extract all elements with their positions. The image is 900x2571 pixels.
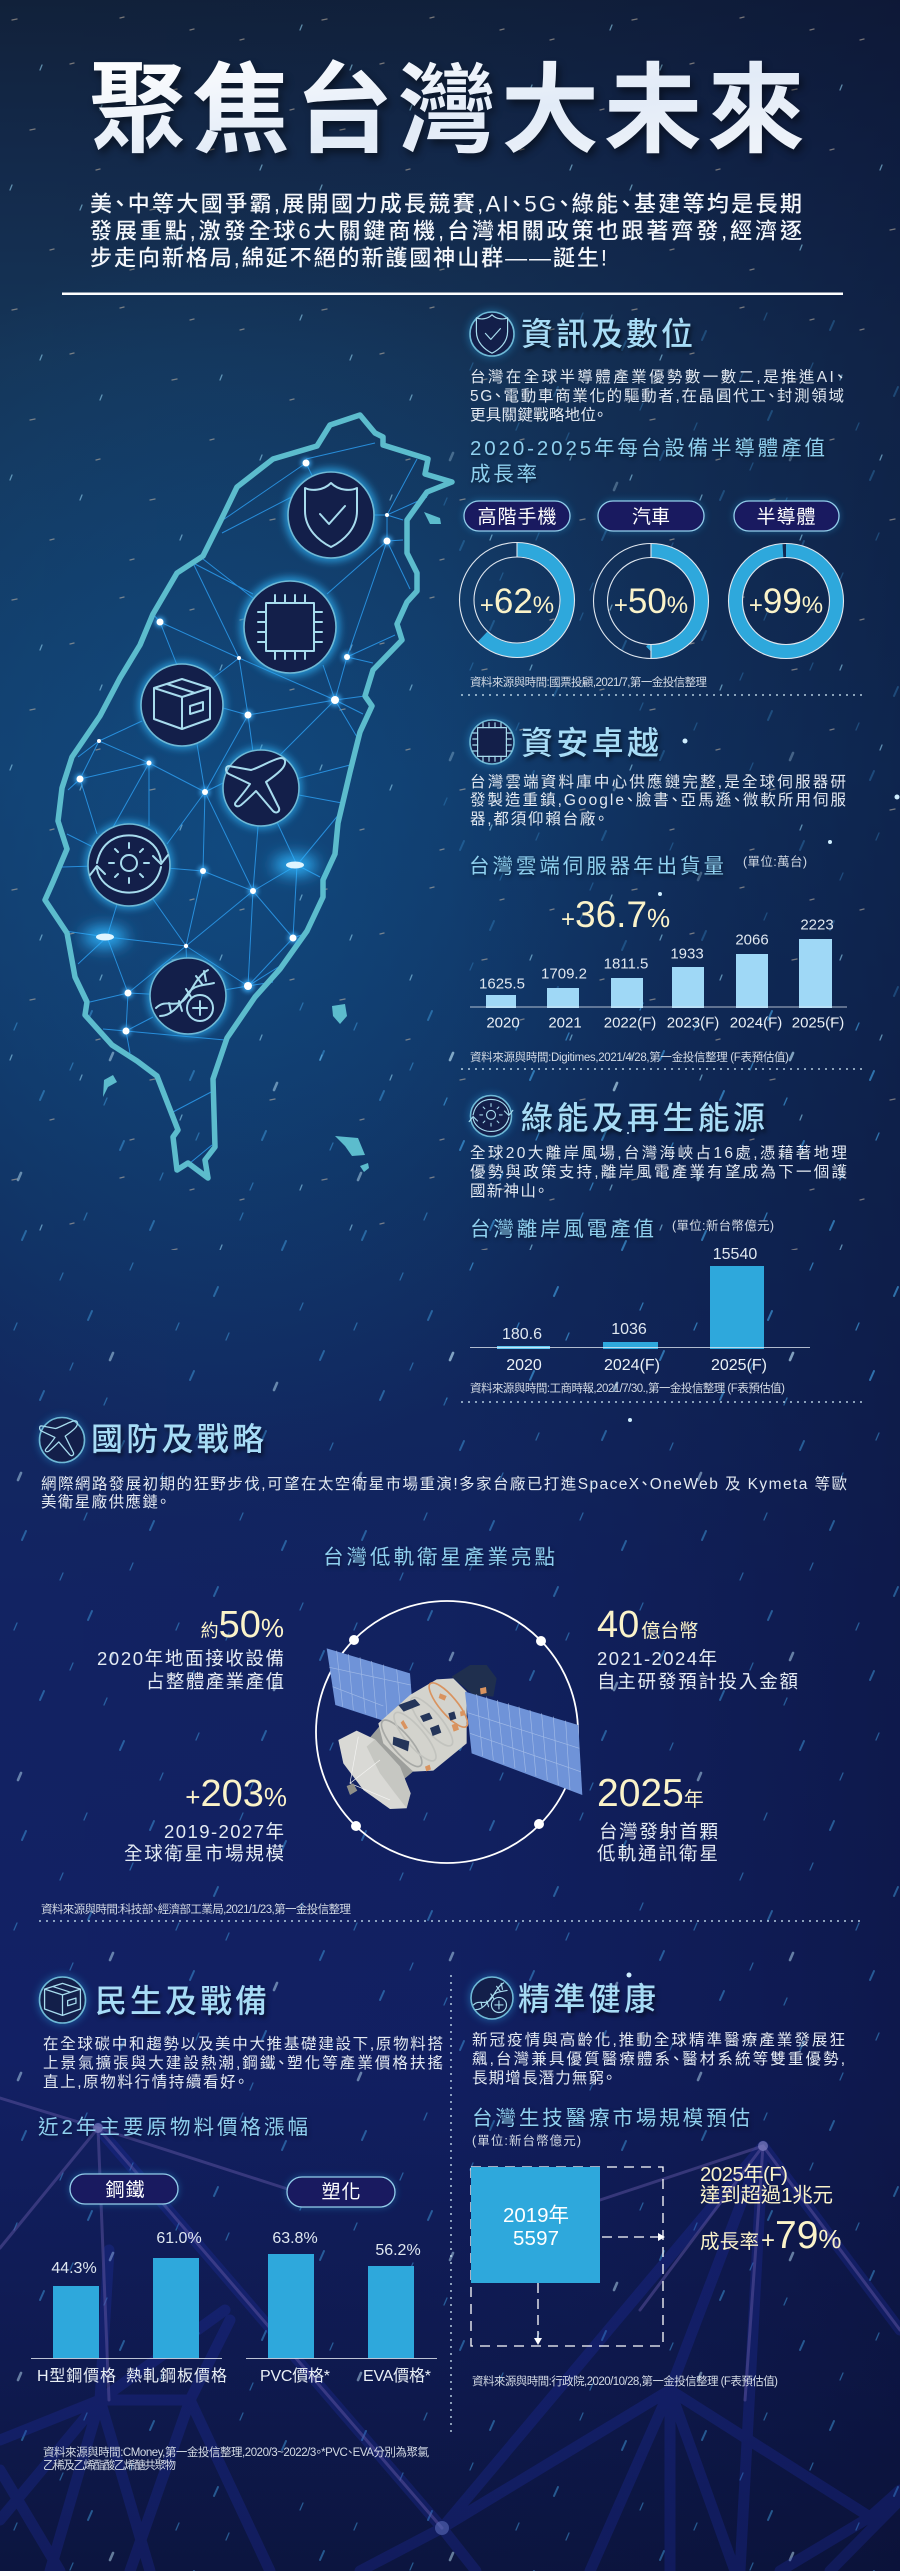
bar chart: servers: 2066 xyxy=(735,932,769,948)
bar chart: offshore wind: 1036 xyxy=(611,1321,647,1338)
chart title: 近2年主要原物料價格漲幅 xyxy=(38,2116,308,2139)
bar chart: materials: 56.2% xyxy=(375,2242,421,2259)
chart title: 台灣雲端伺服器年出貨量 xyxy=(469,855,724,878)
bar chart: servers xyxy=(470,916,847,1032)
bar chart: servers: 2021 xyxy=(548,1014,582,1032)
heading: 資安卓越 xyxy=(521,725,659,761)
stat: 40億台幣: 2021-2024年 xyxy=(597,1648,717,1669)
body text: 發製造重鎮,Google、臉書、亞馬遜、微軟所用伺服 xyxy=(470,791,846,809)
bar chart: materials: 61.0% xyxy=(156,2230,202,2247)
stat: +203% xyxy=(124,1773,287,1864)
intro text: 美、中等大國爭霸,展開國力成長競賽,AI、5G、綠能、基建等均是長期 xyxy=(90,192,802,216)
icon: plane xyxy=(223,750,299,826)
left solar panel xyxy=(327,1648,412,1721)
source: 資料來源與時間:國票投顧,2021/7,第一金投信整理 xyxy=(470,675,708,689)
bar chart: servers: 1709.2 xyxy=(541,966,587,982)
bar chart: materials: 63.8% xyxy=(272,2230,318,2247)
body text: 器,都須仰賴台廠。 xyxy=(470,809,605,828)
panel: 資安卓越 xyxy=(468,718,847,1064)
stat: 40億台幣: 自主研發預計投入金額 xyxy=(597,1671,798,1692)
stat: 40億台幣 xyxy=(597,1604,798,1692)
bar chart: offshore wind xyxy=(470,1246,810,1374)
body text xyxy=(470,772,846,828)
panel: 精準健康 xyxy=(469,1975,845,2388)
body text: 優勢與政策支持,離岸風電產業有望成為下一個護 xyxy=(470,1162,847,1181)
heading icon xyxy=(468,718,516,766)
callout: growth: +79% xyxy=(761,2214,842,2257)
pills: 半導體 xyxy=(756,506,816,528)
body text: 在全球碳中和趨勢以及美中大推基礎建設下,原物料搭 xyxy=(43,2035,443,2053)
body text: 上景氣擴張與大建設熱潮,鋼鐵、塑化等產業價格扶搖 xyxy=(43,2053,443,2072)
stat: 約50% xyxy=(97,1604,284,1692)
bar chart: servers: 2024(F) xyxy=(730,1014,782,1032)
chart title: 2020-2025年每台設備半導體產值 xyxy=(470,437,825,460)
bar chart: materials: EVA價格* xyxy=(363,2367,431,2385)
stat: 約50%: 2020年地面接收設備 xyxy=(97,1648,284,1669)
chart title: 台灣離岸風電產值 xyxy=(470,1218,654,1241)
body text: 5G、電動車商業化的驅動者,在晶圓代工、封測領域 xyxy=(470,387,844,405)
intro text: 步走向新格局,綿延不絕的新護國神山群——誕生! xyxy=(90,246,607,270)
stat: 2025年: 台灣發射首顆 xyxy=(599,1821,718,1842)
body text: 飆,台灣兼具優質醫療體系、醫材系統等雙重優勢, xyxy=(472,2049,845,2068)
panel: 國防及戰略 xyxy=(38,1416,847,1916)
heading: 綠能及再生能源 xyxy=(521,1100,765,1136)
panel: 資訊及數位 xyxy=(460,310,844,689)
source: 資料來源與時間:行政院,2020/10/28,第一金投信整理 (F表預估值) xyxy=(472,2374,778,2388)
panel: 綠能及再生能源 xyxy=(469,1094,847,1395)
callout: growth xyxy=(700,2163,842,2257)
satellite xyxy=(327,1648,582,1809)
donut: 汽車 50% xyxy=(594,544,708,659)
growth callout: +36.7% xyxy=(561,894,670,935)
source: 乙稀及乙烯酯酸乙烯醣共聚物 xyxy=(43,2458,176,2472)
Taiwan outline xyxy=(45,415,452,1178)
body text: 台灣在全球半導體產業優勢數一數二,是推進AI、 xyxy=(470,368,844,386)
body text: 國新神山。 xyxy=(470,1182,545,1200)
offshore islands xyxy=(103,512,441,1172)
body xyxy=(378,1678,467,1772)
heading: 精準健康 xyxy=(518,1981,656,2017)
pills: 高階手機 xyxy=(478,506,556,528)
icon: sun cycle xyxy=(88,824,170,906)
network lines in the lower background xyxy=(0,2098,900,2571)
right solar panel xyxy=(465,1692,582,1795)
icon: shield xyxy=(288,472,374,558)
callout: growth: 達到超過1兆元 xyxy=(700,2184,833,2207)
orbit ring xyxy=(316,1601,578,1863)
bar chart: servers: 2022(F) xyxy=(604,1014,656,1032)
heading icon xyxy=(38,1975,88,2025)
donut: 半導體 99%: +99% xyxy=(749,582,823,621)
stat: 2025年: 低軌通訊衛星 xyxy=(597,1843,718,1864)
bar chart: servers: 1933 xyxy=(670,946,704,962)
Taiwan map xyxy=(45,415,452,1178)
bright nodes xyxy=(76,460,390,1034)
unit: (單位:新台幣億元) xyxy=(672,1218,774,1233)
body text xyxy=(43,2035,443,2091)
source: 資料來源與時間:科技部、經濟部工業局,2021/1/23,第一金投信整理 xyxy=(41,1902,352,1916)
intro text: 發展重點,激發全球6大關鍵商機,台灣相關政策也跟著齊發,經濟逐 xyxy=(90,218,802,244)
bar chart: materials xyxy=(31,2230,437,2385)
callout: growth: 2025年(F) xyxy=(700,2163,788,2186)
source xyxy=(43,2445,430,2472)
body text: 直上,原物料行情持續看好。 xyxy=(43,2072,245,2091)
title: 聚焦台灣大未來 xyxy=(89,55,805,165)
heading icon xyxy=(469,1094,513,1138)
pills xyxy=(70,2174,395,2207)
body text xyxy=(470,1144,847,1200)
donut: 高階手機 62% xyxy=(460,542,574,658)
bar chart: materials: 44.3% xyxy=(51,2260,97,2277)
stat: 2025年 xyxy=(597,1772,718,1864)
chart title xyxy=(470,437,825,486)
size comparison chart: 2019年 xyxy=(503,2204,569,2227)
dish xyxy=(338,1731,411,1809)
source: 資料來源與時間:CMoney,第一金投信整理,2020/3~2022/3。*PVC、EVA分別為聚氯 xyxy=(43,2445,430,2459)
stat: +203%: +203% xyxy=(185,1773,287,1815)
body text: 新冠疫情與高齡化,推動全球精準醫療產業發展狂 xyxy=(472,2031,845,2049)
body text xyxy=(41,1474,847,1511)
glow behind circles xyxy=(85,468,378,1037)
heading icon xyxy=(468,310,516,358)
size comparison chart xyxy=(471,2167,665,2346)
panel: 民生及戰備 xyxy=(31,1975,443,2472)
stat: 約50%: 占整體產業產值 xyxy=(146,1671,284,1692)
network lines on map xyxy=(62,443,427,1163)
body text: 台灣雲端資料庫中心供應鏈完整,是全球伺服器研 xyxy=(470,772,846,791)
bar chart: offshore wind: 2024(F) xyxy=(604,1357,660,1374)
stat: +203%: 全球衛星市場規模 xyxy=(124,1843,284,1864)
bar chart: offshore wind: 2020 xyxy=(506,1357,542,1374)
bar chart: offshore wind: 2025(F) xyxy=(711,1357,767,1374)
stat: 約50%: 約50% xyxy=(201,1604,284,1646)
donut: 半導體 99% xyxy=(728,544,844,658)
icon: chip xyxy=(244,581,336,673)
heading: 民生及戰備 xyxy=(95,1983,267,2019)
intro text xyxy=(90,192,802,270)
bar chart: servers: 2025(F) xyxy=(792,1014,844,1032)
chart title: 台灣生技醫療市場規模預估 xyxy=(472,2107,750,2130)
heading: 國防及戰略 xyxy=(91,1421,264,1457)
bar chart: materials: H型鋼價格 xyxy=(37,2367,116,2385)
body text: 更具關鍵戰略地位。 xyxy=(470,406,604,424)
body text: 網際網路發展初期的狂野步伐,可望在太空衛星市場重演!多家台廠已打進SpaceX、OneWeb 及 Kymeta 等歐 xyxy=(41,1474,847,1493)
bar chart: materials: PVC價格* xyxy=(260,2367,330,2385)
donut: 汽車 50%: +50% xyxy=(614,582,688,621)
dark module xyxy=(452,1665,497,1697)
body text: 美衛星廠供應鏈。 xyxy=(41,1492,167,1511)
node halos xyxy=(75,458,392,1036)
chart title: 成長率 xyxy=(470,463,537,486)
unit: (單位:萬台) xyxy=(743,854,807,869)
stat: +203%: 2019-2027年 xyxy=(164,1821,284,1842)
pills: 塑化 xyxy=(322,2181,360,2203)
bar chart: servers: 1625.5 xyxy=(479,976,525,992)
size comparison chart: 5597 xyxy=(513,2227,559,2250)
icon: box xyxy=(141,664,223,746)
chart title: 台灣低軌衛星產業亮點 xyxy=(323,1546,555,1569)
body text: 全球20大離岸風場,台灣海峽占16處,憑藉著地理 xyxy=(470,1144,847,1162)
heading: 資訊及數位 xyxy=(521,316,693,352)
bar chart: offshore wind: 180.6 xyxy=(502,1326,542,1343)
bar chart: servers: 1811.5 xyxy=(604,956,648,972)
body text: 長期增長潛力無窮。 xyxy=(472,2069,613,2087)
heading icon xyxy=(469,1975,515,2021)
stat: 2025年: 2025年 xyxy=(597,1772,704,1815)
bar chart: servers: 2023(F) xyxy=(667,1014,719,1032)
unit: (單位:新台幣億元) xyxy=(472,2133,581,2148)
bar chart: servers: 2223 xyxy=(800,916,834,934)
source: 資料來源與時間:工商時報,2021/7/30.,第一金投信整理 (F表預估值) xyxy=(470,1381,785,1395)
flares xyxy=(83,855,317,947)
body text xyxy=(470,368,844,424)
bar chart: offshore wind: 15540 xyxy=(713,1246,757,1263)
source: 資料來源與時間:Digitimes,2021/4/28,第一金投信整理 (F表預估值) xyxy=(470,1050,789,1064)
stat: 40億台幣: 40億台幣 xyxy=(597,1604,698,1646)
connector between dish and body xyxy=(365,1722,415,1787)
icon: dna xyxy=(150,958,226,1034)
heading icon xyxy=(38,1416,86,1464)
body text xyxy=(472,2031,845,2087)
bar chart: servers: 2020 xyxy=(486,1014,520,1032)
pills xyxy=(464,501,839,531)
bar chart: materials: 熱軋鋼板價格 xyxy=(126,2367,227,2385)
donut: 高階手機 62%: +62% xyxy=(480,582,554,621)
callout: growth: 成長率 xyxy=(700,2231,759,2253)
pills: 汽車 xyxy=(632,506,670,528)
pills: 鋼鐵 xyxy=(106,2179,144,2201)
